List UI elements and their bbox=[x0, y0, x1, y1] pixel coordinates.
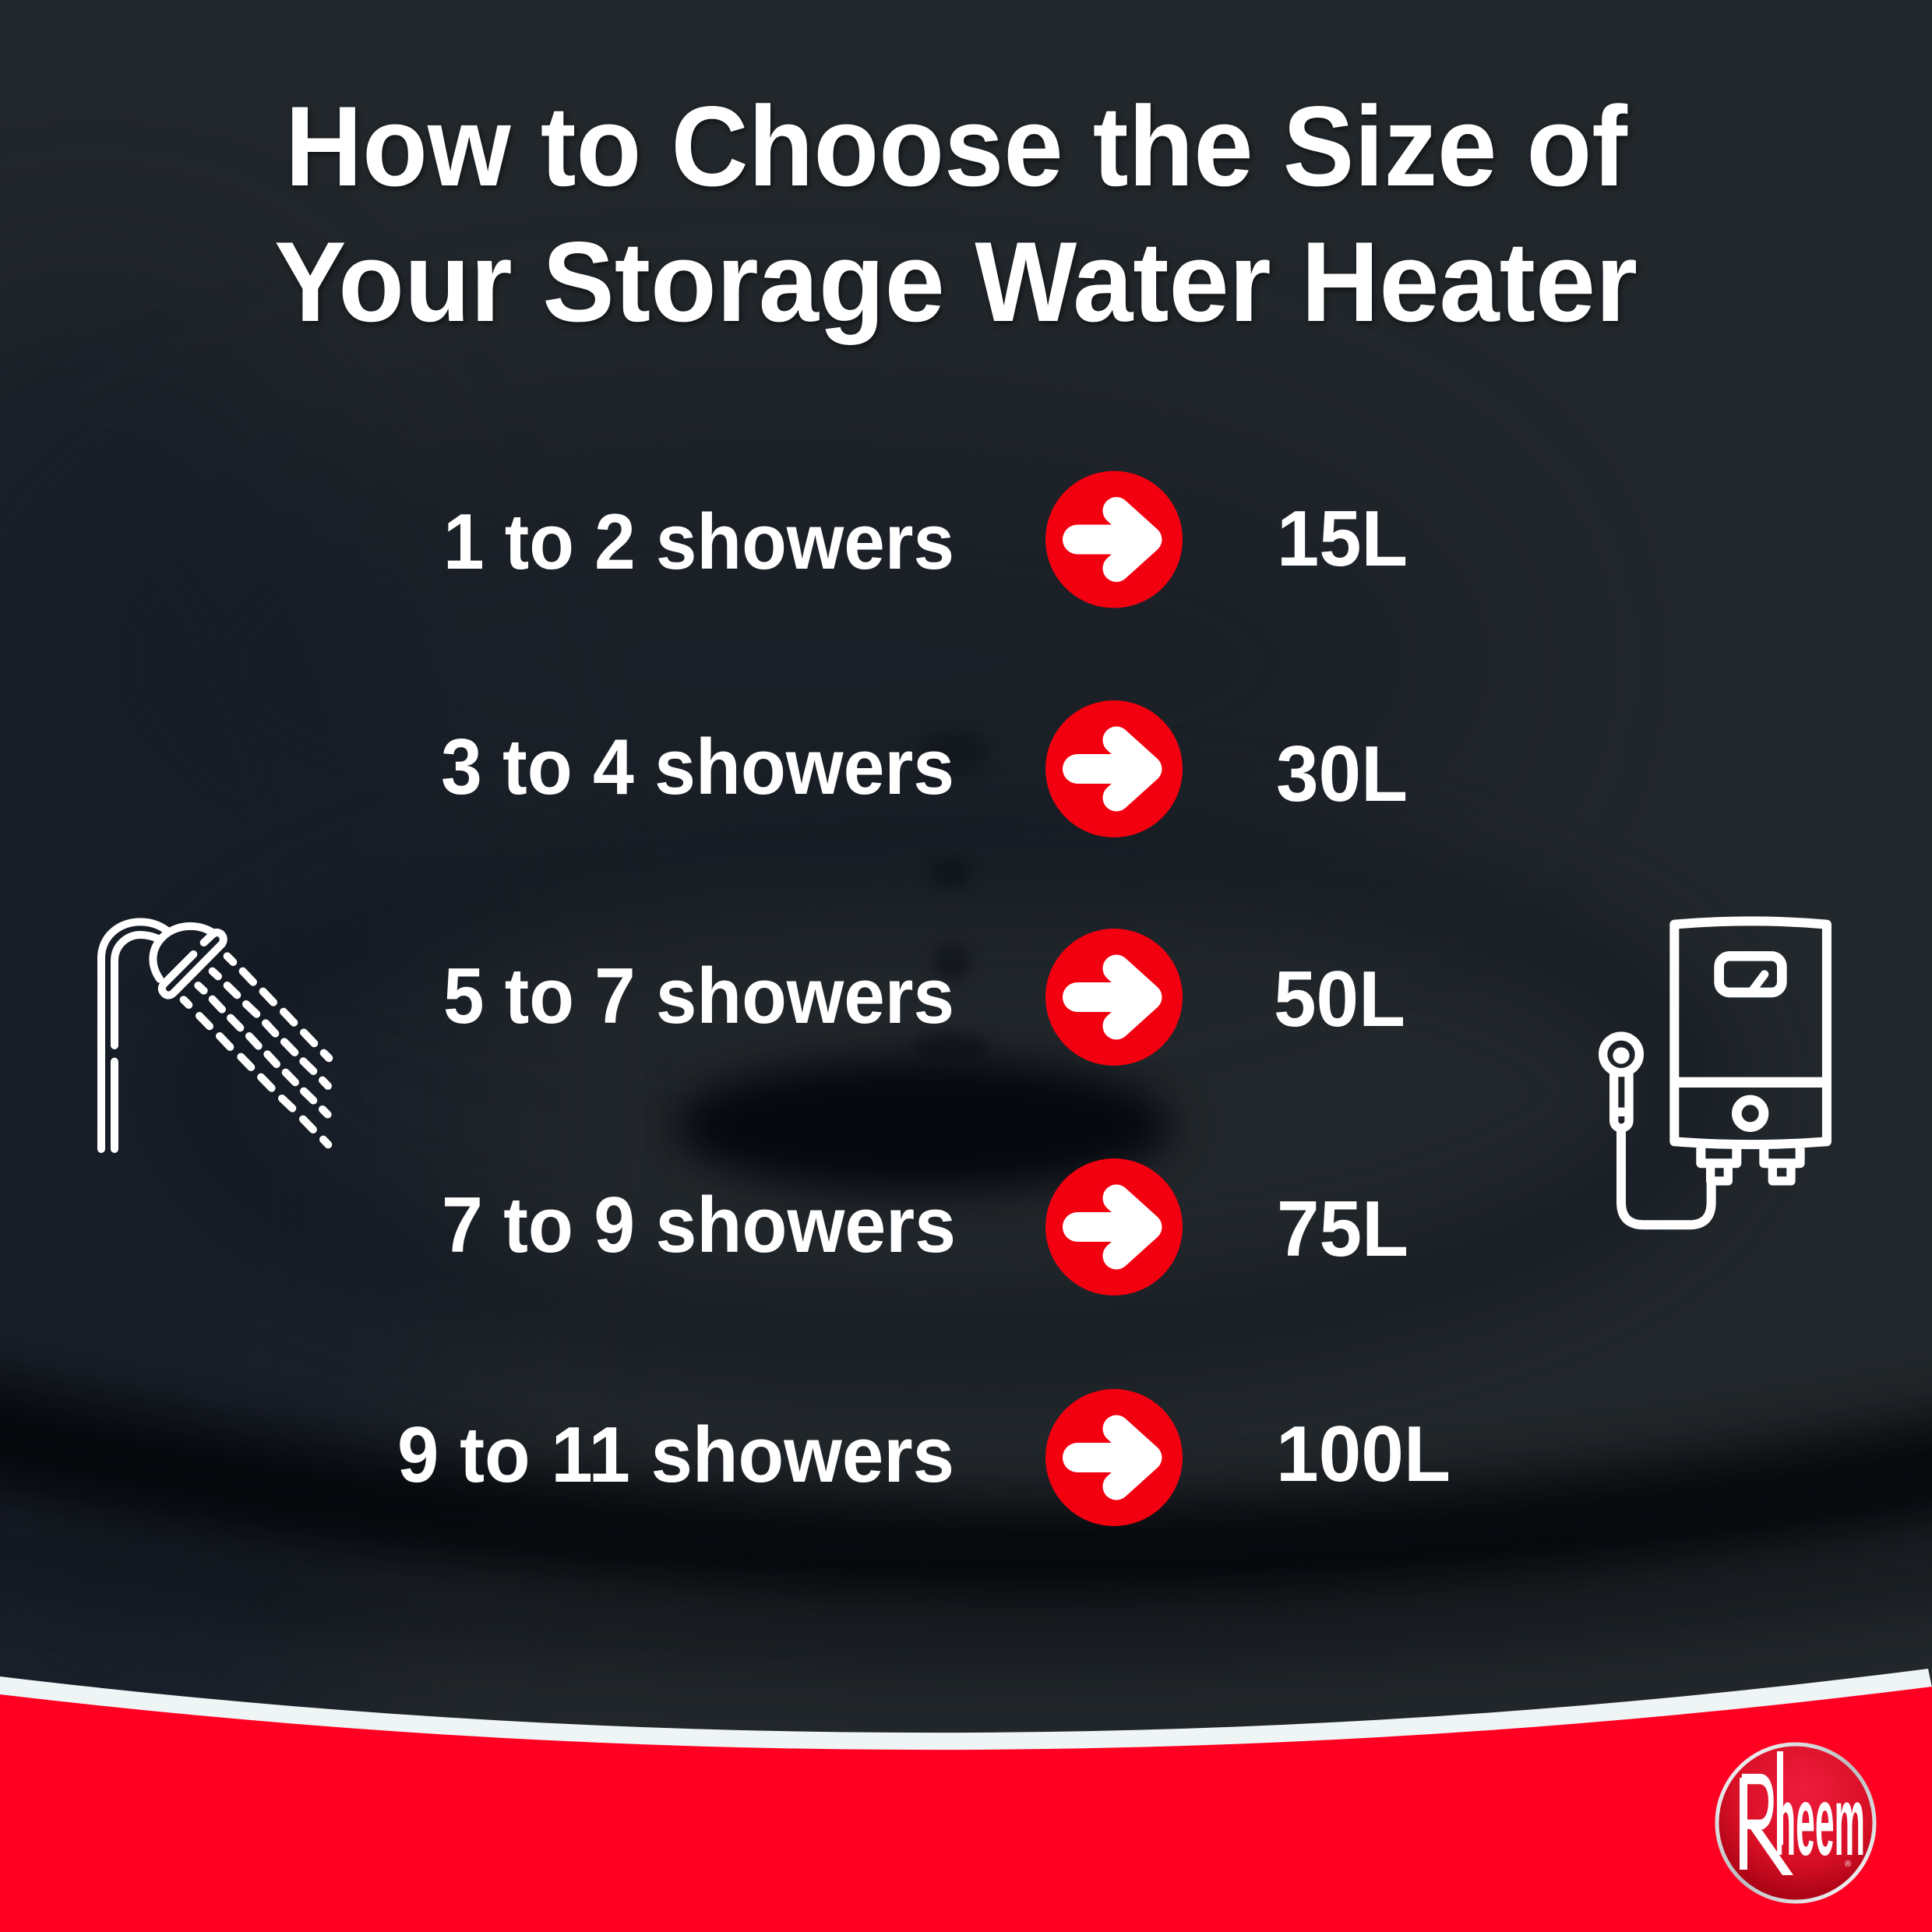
icon: water heater bbox=[1603, 921, 1827, 1225]
row 1: 1 to 2 showers to 15L: 1 to 2 showers bbox=[443, 499, 954, 586]
row 3: 5 to 7 showers to 50L: 50L bbox=[1274, 956, 1405, 1043]
row 5: 9 to 11 showers to 100L bbox=[397, 1389, 1451, 1526]
icon: arrow 1 bbox=[1045, 471, 1183, 608]
row 2: 3 to 4 showers to 30L: 30L bbox=[1276, 731, 1408, 818]
row 3: 5 to 7 showers to 50L: 5 to 7 showers bbox=[443, 953, 954, 1040]
row 4: 7 to 9 showers to 75L bbox=[442, 1158, 1408, 1296]
icon: arrow 4 bbox=[1045, 1158, 1183, 1296]
row 4: 7 to 9 showers to 75L: 75L bbox=[1277, 1186, 1408, 1273]
row 2: 3 to 4 showers to 30L: 3 to 4 showers bbox=[441, 724, 954, 811]
row 1: 1 to 2 showers to 15L bbox=[443, 471, 1408, 608]
row 5: 9 to 11 showers to 100L: 9 to 11 showers bbox=[397, 1412, 954, 1499]
bottom white curved band bbox=[0, 1669, 1932, 1807]
logo: Rheem: R bbox=[1737, 1743, 1778, 1899]
title: How to Choose the Size of bbox=[285, 83, 1627, 210]
row 5: 9 to 11 showers to 100L: 100L bbox=[1276, 1411, 1451, 1498]
row 1: 1 to 2 showers to 15L: 15L bbox=[1277, 495, 1408, 583]
icon: arrow 2 bbox=[1045, 700, 1183, 837]
icon: arrow 3 bbox=[1045, 929, 1183, 1066]
row 2: 3 to 4 showers to 30L bbox=[441, 700, 1408, 837]
logo: Rheem bbox=[1717, 1743, 1874, 1902]
logo: Rheem: ® bbox=[1845, 1860, 1851, 1869]
bottom red footer bbox=[0, 1687, 1932, 1932]
icon: arrow 5 bbox=[1045, 1389, 1183, 1526]
row 4: 7 to 9 showers to 75L: 7 to 9 showers bbox=[442, 1182, 956, 1269]
title: Your Storage Water Heater bbox=[274, 218, 1638, 345]
title bbox=[274, 83, 1638, 345]
row 3: 5 to 7 showers to 50L bbox=[443, 929, 1405, 1066]
icon: shower bbox=[101, 922, 329, 1149]
